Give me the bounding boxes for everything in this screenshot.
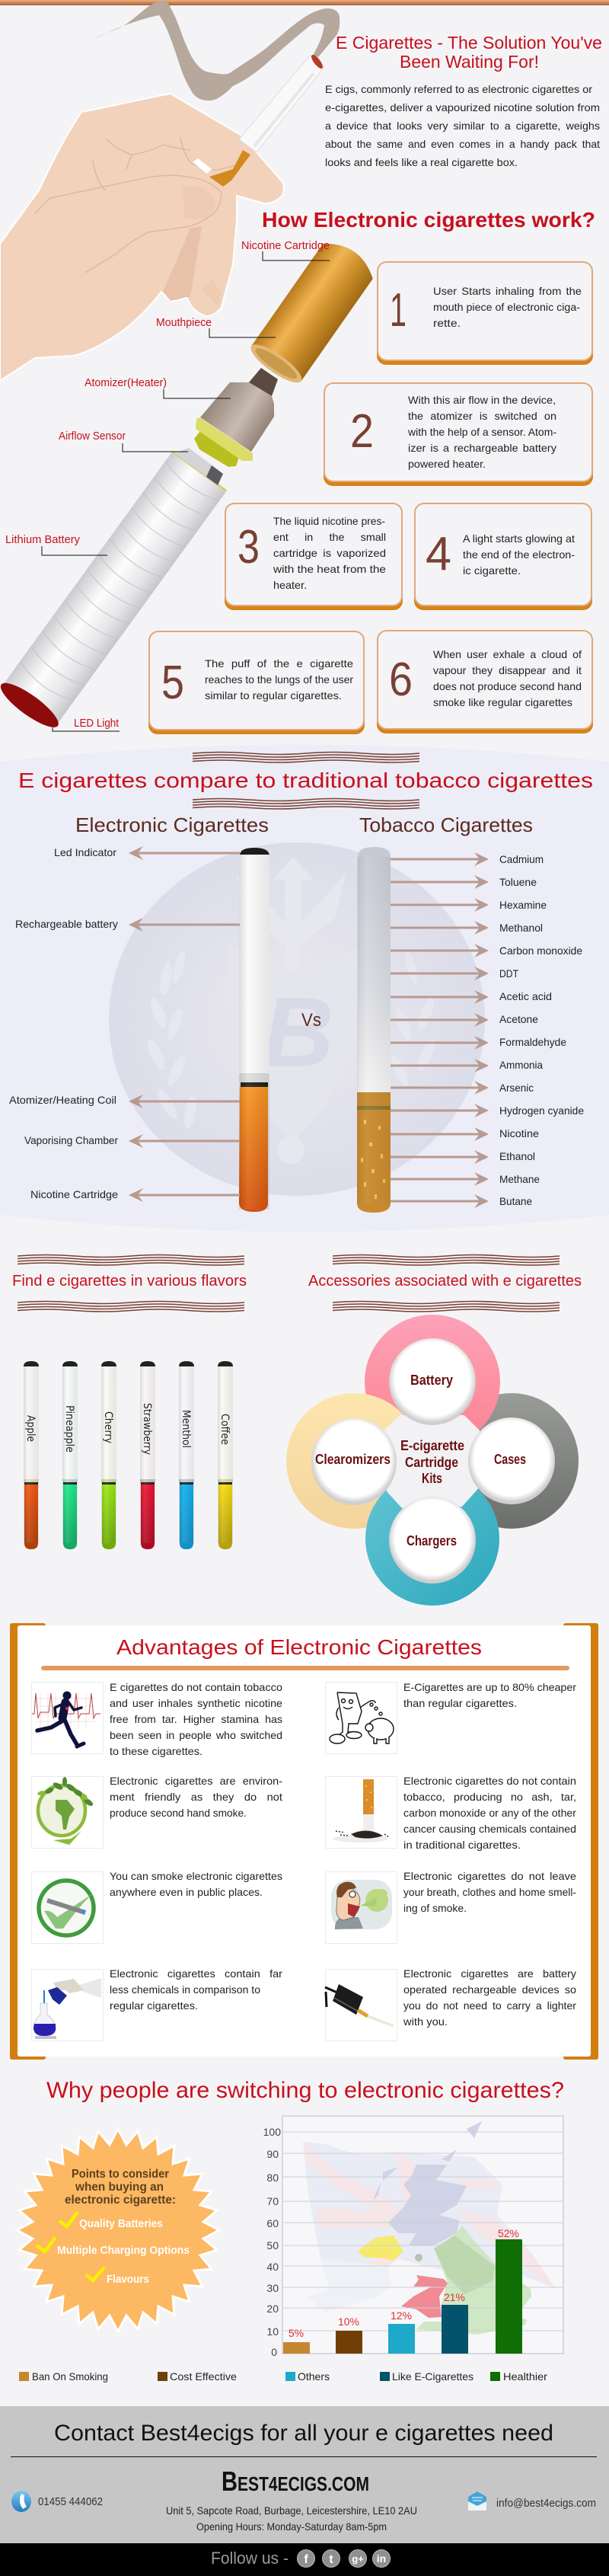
uk map watermark — [303, 2121, 556, 2335]
accessories diagram — [286, 1315, 579, 1606]
pen: apple — [24, 1361, 39, 1549]
icon: cigarette butt — [326, 1776, 397, 1848]
flavors heading — [12, 1255, 247, 1312]
axis labels: 50 — [266, 2239, 279, 2252]
tobacco chemicals callouts: Formaldehyde — [499, 1036, 566, 1048]
step 1 panel: rette. — [433, 317, 461, 329]
axis labels: 80 — [266, 2172, 279, 2184]
intro text block: e-cigarettes, deliver a vapourized nicotine solution from — [325, 101, 600, 113]
text: anywhere: You can smoke electronic cigarettes — [110, 1870, 282, 1882]
accessories diagram: Clearomizers — [315, 1452, 391, 1467]
text: chemicals: regular cigarettes. — [110, 1999, 198, 2012]
vs label: Vs — [301, 1010, 321, 1031]
text: no tobacco: in traditional cigarettes. — [403, 1839, 521, 1851]
tobacco chemicals callouts: Butane — [499, 1195, 532, 1207]
step 4 panel: A light starts glowing at — [463, 532, 575, 545]
legend: Healthier — [503, 2370, 547, 2383]
pen: pineapple — [62, 1361, 78, 1549]
text: anywhere — [110, 1870, 282, 1898]
icon: money and piggy bank — [326, 1682, 397, 1753]
accessories diagram: Battery — [410, 1373, 453, 1388]
step 3 panel: with the heat from the — [273, 563, 386, 575]
text: stamina: been seen in people who switched — [110, 1729, 282, 1741]
step 1 panel: mouth piece of electronic ciga- — [433, 301, 580, 313]
labels and leader lines: Nicotine Cartridge — [241, 239, 330, 252]
value labels: 12% — [391, 2309, 412, 2322]
step 5 panel: similar to regular cigarettes. — [205, 689, 342, 702]
axis labels — [263, 2126, 281, 2358]
intro text block: a device that looks very similar to a cigarette, weighs — [325, 120, 600, 132]
text: environment: Electronic cigarettes are environ- — [110, 1775, 282, 1787]
intro text block: about the same and even comes in a handy pack that — [325, 138, 600, 150]
tobacco chemicals callouts: Ethanol — [499, 1150, 535, 1162]
step 1 panel — [377, 262, 593, 365]
step 4 panel: 4 — [426, 528, 451, 580]
icon: twitter: t — [329, 2553, 333, 2566]
e-cigarette parts callouts: Led Indicator — [54, 846, 116, 858]
text: smell — [403, 1870, 576, 1914]
petal: chargers — [389, 1497, 476, 1584]
e-cigarette parts callouts: Nicotine Cartridge — [30, 1188, 118, 1200]
starburst callout: Flavours — [107, 2273, 149, 2286]
axis labels: 100 — [263, 2126, 281, 2138]
tobacco cigarette — [357, 847, 391, 1213]
starburst callout — [17, 2129, 219, 2332]
text: cheaper — [403, 1681, 576, 1709]
illustration: hand holding cigarette with smoke — [0, 1, 340, 381]
step 5 panel: reaches to the lungs of the user — [205, 673, 353, 686]
address: Unit 5, Sapcote Road, Burbage, Leicestershire, LE10 2AU — [166, 2504, 417, 2517]
pen: coffee — [218, 1361, 233, 1549]
e-cigarette parts callouts: Atomizer/Heating Coil — [9, 1094, 116, 1106]
intro text block: E cigs, commonly referred to as electronic cigarettes or — [325, 83, 592, 95]
text: battery operated — [403, 1967, 576, 2028]
pen: strawberry: Strawberry — [141, 1403, 153, 1455]
connector — [174, 448, 223, 485]
intro text block — [325, 83, 600, 168]
labels and leader lines: Atomizer(Heater) — [84, 376, 167, 389]
step 3 panel: cartridge is vaporized — [273, 547, 386, 559]
icon: facebook — [297, 2550, 315, 2567]
battery — [0, 450, 228, 733]
text: no tobacco: carbon monoxide or any of the other — [403, 1807, 576, 1819]
tobacco chemicals callouts: Hexamine — [499, 899, 547, 911]
tobacco chemicals callouts: Arsenic — [499, 1082, 534, 1094]
text: battery operated: with you. — [403, 2015, 448, 2028]
pen: strawberry — [140, 1361, 155, 1549]
step 3 panel: 3 — [238, 521, 260, 574]
starburst callout: Quality Batteries — [79, 2217, 163, 2230]
step 6 panel: smoke like regular cigarettes — [433, 696, 572, 708]
column headings: Tobacco Cigarettes — [359, 813, 533, 836]
starburst callout: when buying an — [75, 2181, 164, 2194]
phone number: 01455 444062 — [38, 2495, 103, 2508]
watermark emblem — [109, 842, 485, 1196]
hand — [0, 94, 284, 381]
step 5 panel: 5 — [161, 657, 184, 709]
accessories heading — [308, 1255, 582, 1312]
title: e cigarettes solution: Been Waiting For! — [400, 52, 539, 72]
step 3 panel: heater. — [273, 579, 307, 591]
pen: cherry: Cherry — [102, 1411, 114, 1443]
panel: social footer — [0, 2543, 609, 2576]
petal: cases — [468, 1417, 555, 1504]
step 2 panel: powered heater. — [408, 458, 486, 470]
step 2 panel — [324, 383, 593, 486]
petal: clearomizers — [311, 1418, 397, 1505]
step 2 panel: With this air flow in the device, — [408, 394, 556, 406]
legend: Others — [298, 2370, 330, 2383]
value labels: 52% — [498, 2227, 519, 2239]
text: chemicals: Electronic cigarettes contain far — [110, 1967, 282, 1980]
step 1 panel: 1 — [390, 284, 407, 337]
icon: linkedin — [373, 2550, 390, 2567]
intro text block: looks and feels like a real cigarette box. — [325, 156, 518, 168]
icon: check with e-cigarette — [32, 1872, 104, 1944]
text: no tobacco: cancer causing chemicals contained — [403, 1823, 576, 1835]
text: anywhere: anywhere even in public places. — [110, 1886, 263, 1898]
logo text: BEST4ECIGS.COM — [222, 2466, 369, 2497]
value labels — [289, 2227, 519, 2339]
text: no tobacco: tobacco, producing no ash, tar, — [403, 1791, 576, 1803]
petal: battery — [389, 1338, 476, 1425]
accessories diagram: Chargers — [407, 1533, 457, 1548]
electronic cigarette — [239, 848, 269, 1212]
comparison section background — [0, 745, 609, 1232]
e-cigarette parts callouts: Rechargeable battery — [15, 918, 118, 930]
tobacco chemicals callouts: Hydrogen cyanide — [499, 1104, 584, 1117]
value labels: 21% — [444, 2291, 465, 2303]
icon: google plus: g+ — [352, 2553, 364, 2565]
text: smell: ing of smoke. — [403, 1902, 467, 1914]
watermark emblem: B — [263, 976, 334, 1088]
text: stamina: E cigarettes do not contain tobacco — [110, 1681, 282, 1693]
step 2 panel: with the help of a sensor. Atom- — [407, 426, 556, 438]
address: Opening Hours: Monday-Saturday 8am-5pm — [196, 2520, 387, 2533]
starburst callout: Points to consider — [72, 2168, 169, 2181]
pen: cherry — [101, 1361, 116, 1549]
airflow sensor — [194, 430, 239, 467]
heading: comparison: E cigarettes compare to traditional tobacco cigarettes — [18, 769, 593, 792]
step 6 panel — [377, 631, 593, 733]
text: smell: Electronic cigarettes do not leave — [403, 1870, 576, 1882]
email address: info@best4ecigs.com — [496, 2497, 596, 2510]
title: e cigarettes solution — [336, 33, 602, 72]
icon: linkedin: in — [377, 2552, 386, 2565]
smoke — [95, 1, 340, 101]
labels and leader lines — [5, 239, 330, 731]
value labels: 5% — [289, 2327, 304, 2339]
text: stamina: free from tar. Higher stamina has — [110, 1713, 282, 1725]
labels and leader lines: Mouthpiece — [156, 316, 212, 329]
text: stamina: and user inhales synthetic nicotine — [110, 1697, 282, 1709]
tobacco chemicals callouts: Acetone — [499, 1013, 538, 1025]
text: stamina — [110, 1681, 282, 1757]
text: chemicals: less chemicals in comparison to — [110, 1983, 260, 1996]
step 5 panel — [148, 631, 365, 734]
axis labels: 20 — [266, 2303, 279, 2315]
text: no tobacco — [403, 1775, 576, 1851]
accessories diagram: E-cigarette — [400, 1438, 464, 1453]
accessories diagram: Kits — [422, 1471, 442, 1486]
icon: email — [468, 2491, 486, 2510]
pen: menthol — [179, 1361, 194, 1549]
accessories heading: Accessories associated with e cigarettes — [308, 1273, 582, 1290]
icon: twitter — [323, 2550, 340, 2567]
tobacco chemicals callouts: Acetic acid — [499, 990, 552, 1002]
axis labels: 90 — [266, 2148, 279, 2160]
advantages heading: Advantages of Electronic Cigarettes — [116, 1635, 482, 1659]
step 4 panel: ic cigarette. — [463, 564, 521, 577]
starburst callout: electronic cigarette: — [65, 2194, 176, 2207]
bars — [283, 2342, 310, 2354]
text: battery operated: you do not need to carry a lighter — [403, 1999, 576, 2012]
step 3 panel: ent in the small — [273, 531, 386, 543]
step 4 panel: the end of the electron- — [463, 548, 575, 561]
e-cigarette parts callouts: Vaporising Chamber — [24, 1134, 118, 1146]
axis labels: 10 — [266, 2325, 279, 2338]
text: environment — [110, 1775, 282, 1819]
step 2 panel: 2 — [350, 405, 374, 458]
column headings: Electronic Cigarettes — [75, 813, 269, 836]
flavor pens — [24, 1361, 233, 1549]
accessories diagram: Cartridge — [405, 1455, 458, 1470]
tobacco chemicals callouts: Ammonia — [499, 1059, 543, 1071]
tobacco chemicals callouts: Nicotine — [499, 1127, 539, 1139]
text: cheaper: than regular cigarettes. — [403, 1697, 517, 1709]
nicotine cartridge — [246, 235, 379, 388]
address — [166, 2504, 417, 2533]
icon: google plus — [349, 2550, 367, 2567]
legend: Like E-Cigarettes — [392, 2370, 473, 2383]
column headings — [75, 813, 533, 836]
text: environment: produce second hand smoke. — [110, 1807, 247, 1819]
step 6 panel: 6 — [389, 654, 413, 706]
labels and leader lines: Airflow Sensor — [59, 430, 126, 443]
accessories diagram: Cases — [494, 1452, 526, 1467]
step 6 panel: When user exhale a cloud of — [433, 648, 582, 660]
top bar — [0, 0, 609, 5]
tobacco chemicals callouts: Toluene — [499, 876, 537, 888]
text: no tobacco: Electronic cigarettes do not contain — [403, 1775, 576, 1787]
pen: menthol: Menthol — [180, 1410, 192, 1448]
text: battery operated: operated rechargeable devices so — [403, 1983, 576, 1996]
text: smell: your breath, clothes and home smell- — [403, 1886, 576, 1898]
text: stamina: to these cigarettes. — [110, 1745, 202, 1757]
flavors heading: Find e cigarettes in various flavors — [12, 1273, 247, 1290]
step 3 panel: The liquid nicotine pres- — [273, 515, 385, 527]
tobacco chemicals callouts: Carbon monoxide — [499, 944, 582, 957]
step 2 panel: the atomizer is switched on — [408, 410, 556, 422]
starburst callout: Multiple Charging Options — [57, 2244, 190, 2257]
icon: green globe — [32, 1776, 104, 1848]
value labels: 10% — [338, 2316, 359, 2328]
panel: advantages — [10, 1623, 598, 2060]
icon: phone — [11, 2491, 31, 2512]
legend — [19, 2370, 547, 2383]
contact heading: Contact Best4ecigs for all your e cigarettes need — [54, 2421, 553, 2446]
step 6 panel: vapour they disappear and it — [433, 664, 582, 676]
step 4 panel — [414, 503, 592, 610]
tobacco chemicals callouts: DDT — [499, 967, 518, 980]
e-cigarette parts callouts — [9, 846, 240, 1202]
axis labels: 40 — [266, 2261, 279, 2273]
step 6 panel: does not produce second hand — [433, 680, 582, 692]
step 5 panel: The puff of the e cigarette — [205, 657, 353, 670]
step 1 panel: User Starts inhaling from the — [433, 285, 582, 297]
legend: Cost Effective — [170, 2370, 237, 2383]
labels and leader lines: LED Light — [74, 717, 120, 730]
axis labels: 60 — [266, 2217, 279, 2229]
icon: runner — [32, 1682, 104, 1753]
legend: Ban On Smoking — [32, 2370, 108, 2383]
heading: why switching: Why people are switching to electronic cigarettes? — [46, 2078, 564, 2103]
tobacco chemicals callouts: Methane — [499, 1173, 540, 1185]
step 2 panel: izer is a rechargeable battery — [408, 442, 556, 454]
pen: coffee: Coffee — [218, 1414, 231, 1445]
pen: pineapple: Pineapple — [63, 1405, 75, 1453]
pen: apple: Apple — [24, 1415, 37, 1442]
icon: chemistry flask — [32, 1970, 104, 2041]
panel: social footer: Follow us - — [211, 2549, 289, 2568]
diagram: exploded electronic cigarette — [0, 235, 379, 733]
axis labels: 0 — [271, 2346, 277, 2358]
labels and leader lines: Lithium Battery — [5, 533, 80, 546]
icon: man with bad breath — [326, 1872, 397, 1944]
icon: usb charger — [325, 1970, 397, 2041]
title: e cigarettes solution: E Cigarettes - The Solution You've — [336, 33, 602, 53]
icon: facebook: f — [304, 2553, 308, 2566]
text: chemicals — [110, 1967, 282, 2012]
axis labels: 30 — [266, 2282, 279, 2294]
tobacco chemicals callouts: Cadmium — [499, 853, 544, 865]
panel: contact footer — [0, 2406, 609, 2543]
heading: how electronic cigarettes work: How Electronic cigarettes work? — [262, 208, 595, 232]
bar chart — [263, 2116, 563, 2358]
cigarette — [239, 56, 324, 152]
text: environment: ment friendly as they do not — [110, 1791, 282, 1803]
axis labels: 70 — [266, 2195, 279, 2207]
atomizer — [249, 368, 278, 396]
tobacco chemicals callouts — [391, 852, 584, 1208]
text: cheaper: E-Cigarettes are up to 80% cheaper — [403, 1681, 576, 1693]
text: battery operated: Electronic cigarettes are battery — [403, 1967, 576, 1980]
step 3 panel — [225, 503, 403, 610]
tobacco chemicals callouts: Methanol — [499, 922, 543, 934]
